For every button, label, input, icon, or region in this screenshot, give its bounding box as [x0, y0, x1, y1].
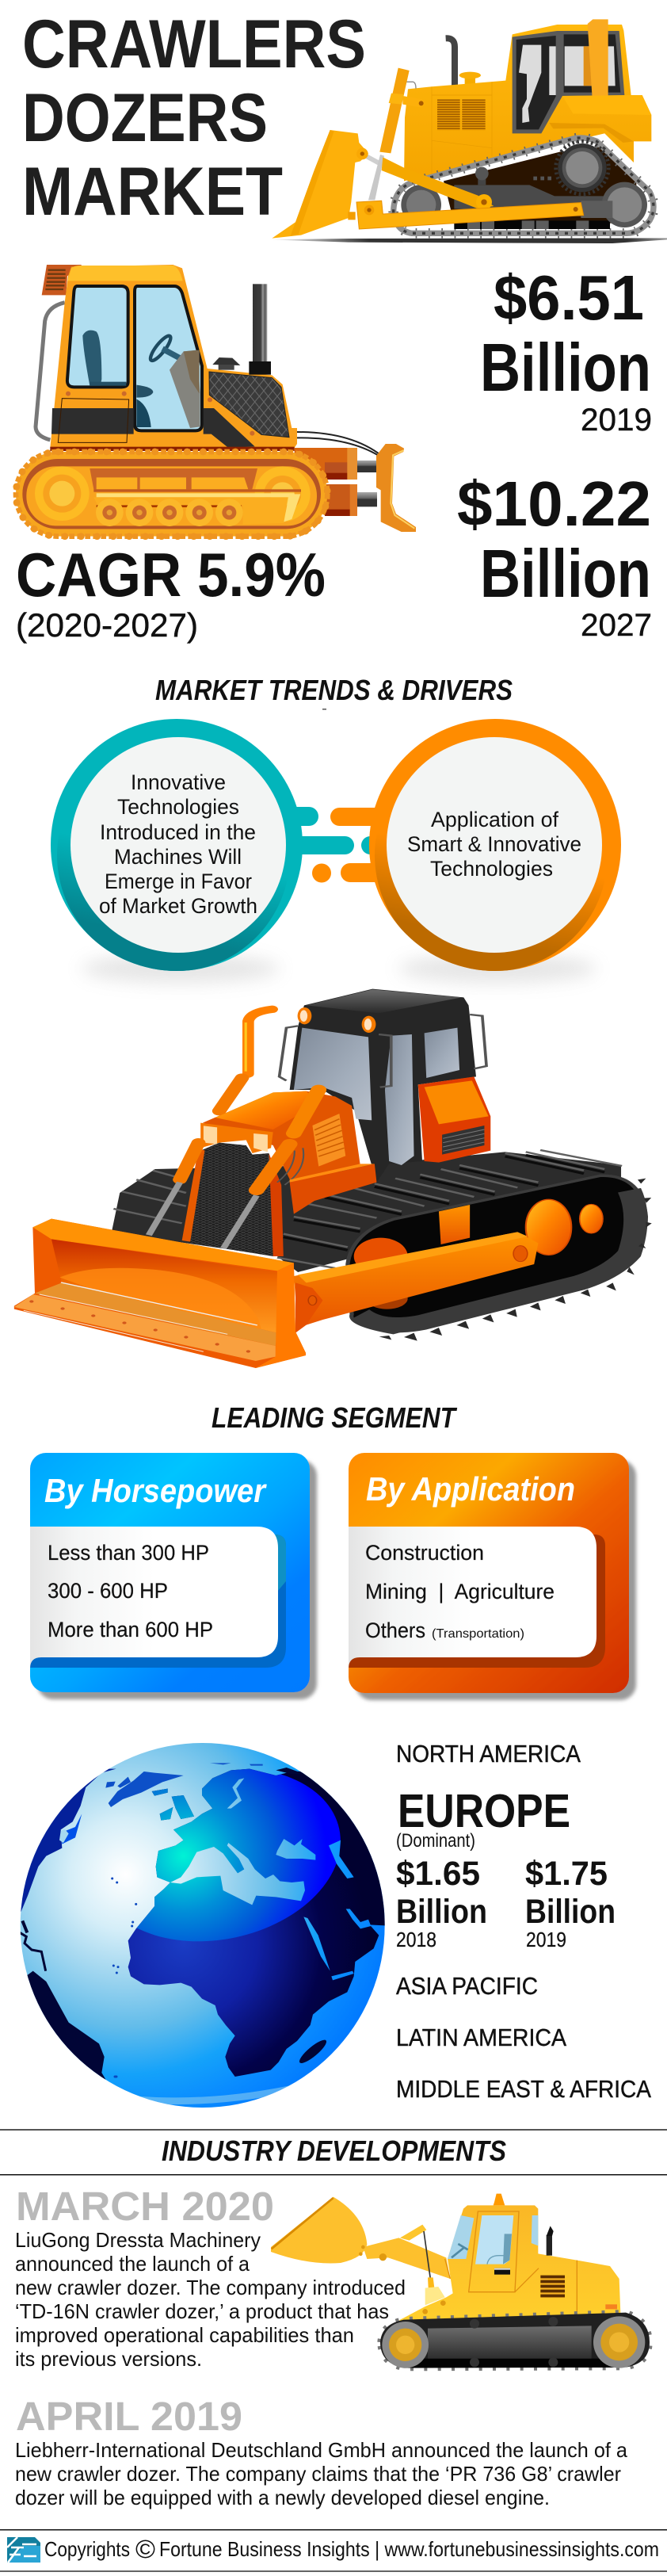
market value 2027: 2027	[581, 608, 652, 643]
horsepower list: More than 600 HP	[48, 1618, 213, 1642]
circle: innovative technologies: of Market Growth	[99, 894, 257, 918]
market value 2019	[480, 262, 652, 438]
heading: industry developments: INDUSTRY DEVELOPMENTS	[162, 2135, 506, 2167]
illustration: yellow bulldozer	[269, 19, 667, 243]
circle: innovative technologies: Introduced in the	[100, 820, 256, 844]
region list: LATIN AMERICA	[396, 2024, 566, 2051]
circle: smart technologies	[369, 719, 621, 972]
development: March 2020: announced the launch of a	[15, 2252, 250, 2276]
application list: Construction	[365, 1541, 484, 1565]
development: March 2020: new crawler dozer. The company introduced	[15, 2276, 406, 2299]
footer: ©	[135, 2535, 155, 2563]
title: MARKET	[22, 154, 283, 230]
illustration: orange front-view bulldozer	[14, 989, 652, 1368]
dominant region: Europe: Billion	[525, 1893, 616, 1931]
CAGR: (2020-2027)	[16, 606, 198, 644]
dominant region: Europe: (Dominant)	[396, 1830, 475, 1852]
development: April 2019: Liebherr-International Deutschland GmbH announced the launch of a	[15, 2438, 628, 2462]
illustration: orange side-view dozer	[16, 265, 416, 537]
dominant region: Europe: 2019	[526, 1928, 566, 1951]
heading: leading segment: LEADING SEGMENT	[212, 1401, 458, 1434]
dominant region: Europe: Billion	[396, 1893, 487, 1931]
illustration: globe	[10, 1743, 394, 2108]
application list: (Transportation)	[432, 1627, 524, 1641]
market value 2019: $6.51	[494, 262, 644, 333]
horsepower list: Less than 300 HP	[48, 1541, 209, 1565]
dominant region: Europe: 2018	[396, 1928, 436, 1951]
horsepower list	[48, 1541, 213, 1642]
title: CRAWLERS	[22, 6, 366, 82]
heading: by horsepower: By Horsepower	[44, 1472, 267, 1509]
circle: innovative technologies: Innovative	[131, 770, 226, 794]
circle: smart technologies: Smart & Innovative	[407, 832, 581, 856]
application list: Mining | Agriculture	[365, 1580, 555, 1603]
dominant region: Europe	[396, 1785, 616, 1951]
market value 2027	[457, 468, 652, 643]
drivers diagram	[51, 719, 621, 983]
region list: NORTH AMERICA	[396, 1740, 581, 1768]
circle: innovative technologies: Emerge in Favor	[105, 869, 252, 893]
title: DOZERS	[22, 80, 268, 156]
heading: market trends and drivers: MARKET TRENDS & DRIVERS	[155, 674, 513, 706]
heading: by application: By Application	[366, 1470, 575, 1508]
application list: Others	[365, 1619, 425, 1642]
icon: Fortune Business Insights logo	[7, 2537, 40, 2563]
development: April 2019: new crawler dozer. The company claims that the ‘PR 736 G8’ crawler	[15, 2462, 621, 2486]
region list	[396, 1740, 651, 2103]
market value 2019: 2019	[581, 403, 652, 438]
circle: innovative technologies: Machines Will	[114, 845, 242, 869]
circle: innovative technologies: Technologies	[117, 795, 239, 819]
development: April 2019: dozer will be equipped with a newly developed diesel engine.	[15, 2486, 550, 2509]
development: March 2020: ‘TD-16N crawler dozer,’ a product that has	[15, 2299, 389, 2323]
panel: by horsepower	[30, 1453, 310, 1692]
development: March 2020: improved operational capabilities than	[15, 2323, 354, 2347]
development: March 2020	[15, 2184, 406, 2371]
development: April 2019	[15, 2394, 628, 2509]
dominant region: Europe: EUROPE	[398, 1785, 570, 1837]
development: March 2020: its previous versions.	[15, 2347, 202, 2371]
footer	[0, 2529, 667, 2572]
illustration: yellow crawler loader	[271, 2194, 650, 2368]
development: March 2020: MARCH 2020	[16, 2184, 274, 2229]
footer: Copyrights	[44, 2537, 130, 2561]
panel: by application	[349, 1453, 629, 1693]
title	[22, 6, 366, 230]
dominant region: Europe: $1.65	[396, 1855, 480, 1893]
connector tabs	[277, 807, 404, 883]
region list: ASIA PACIFIC	[396, 1972, 538, 2000]
circle: innovative technologies	[51, 719, 303, 972]
CAGR	[16, 540, 326, 644]
dominant region: Europe: $1.75	[525, 1855, 608, 1893]
application list	[365, 1541, 555, 1642]
development: March 2020: LiuGong Dressta Machinery	[15, 2228, 261, 2252]
development: April 2019: APRIL 2019	[16, 2394, 242, 2439]
circle: smart technologies: Technologies	[430, 857, 553, 881]
circle: smart technologies: Application of	[431, 808, 559, 831]
CAGR: CAGR 5.9%	[16, 540, 326, 610]
market value 2027: $10.22	[457, 468, 651, 539]
horsepower list: 300 - 600 HP	[48, 1579, 168, 1603]
